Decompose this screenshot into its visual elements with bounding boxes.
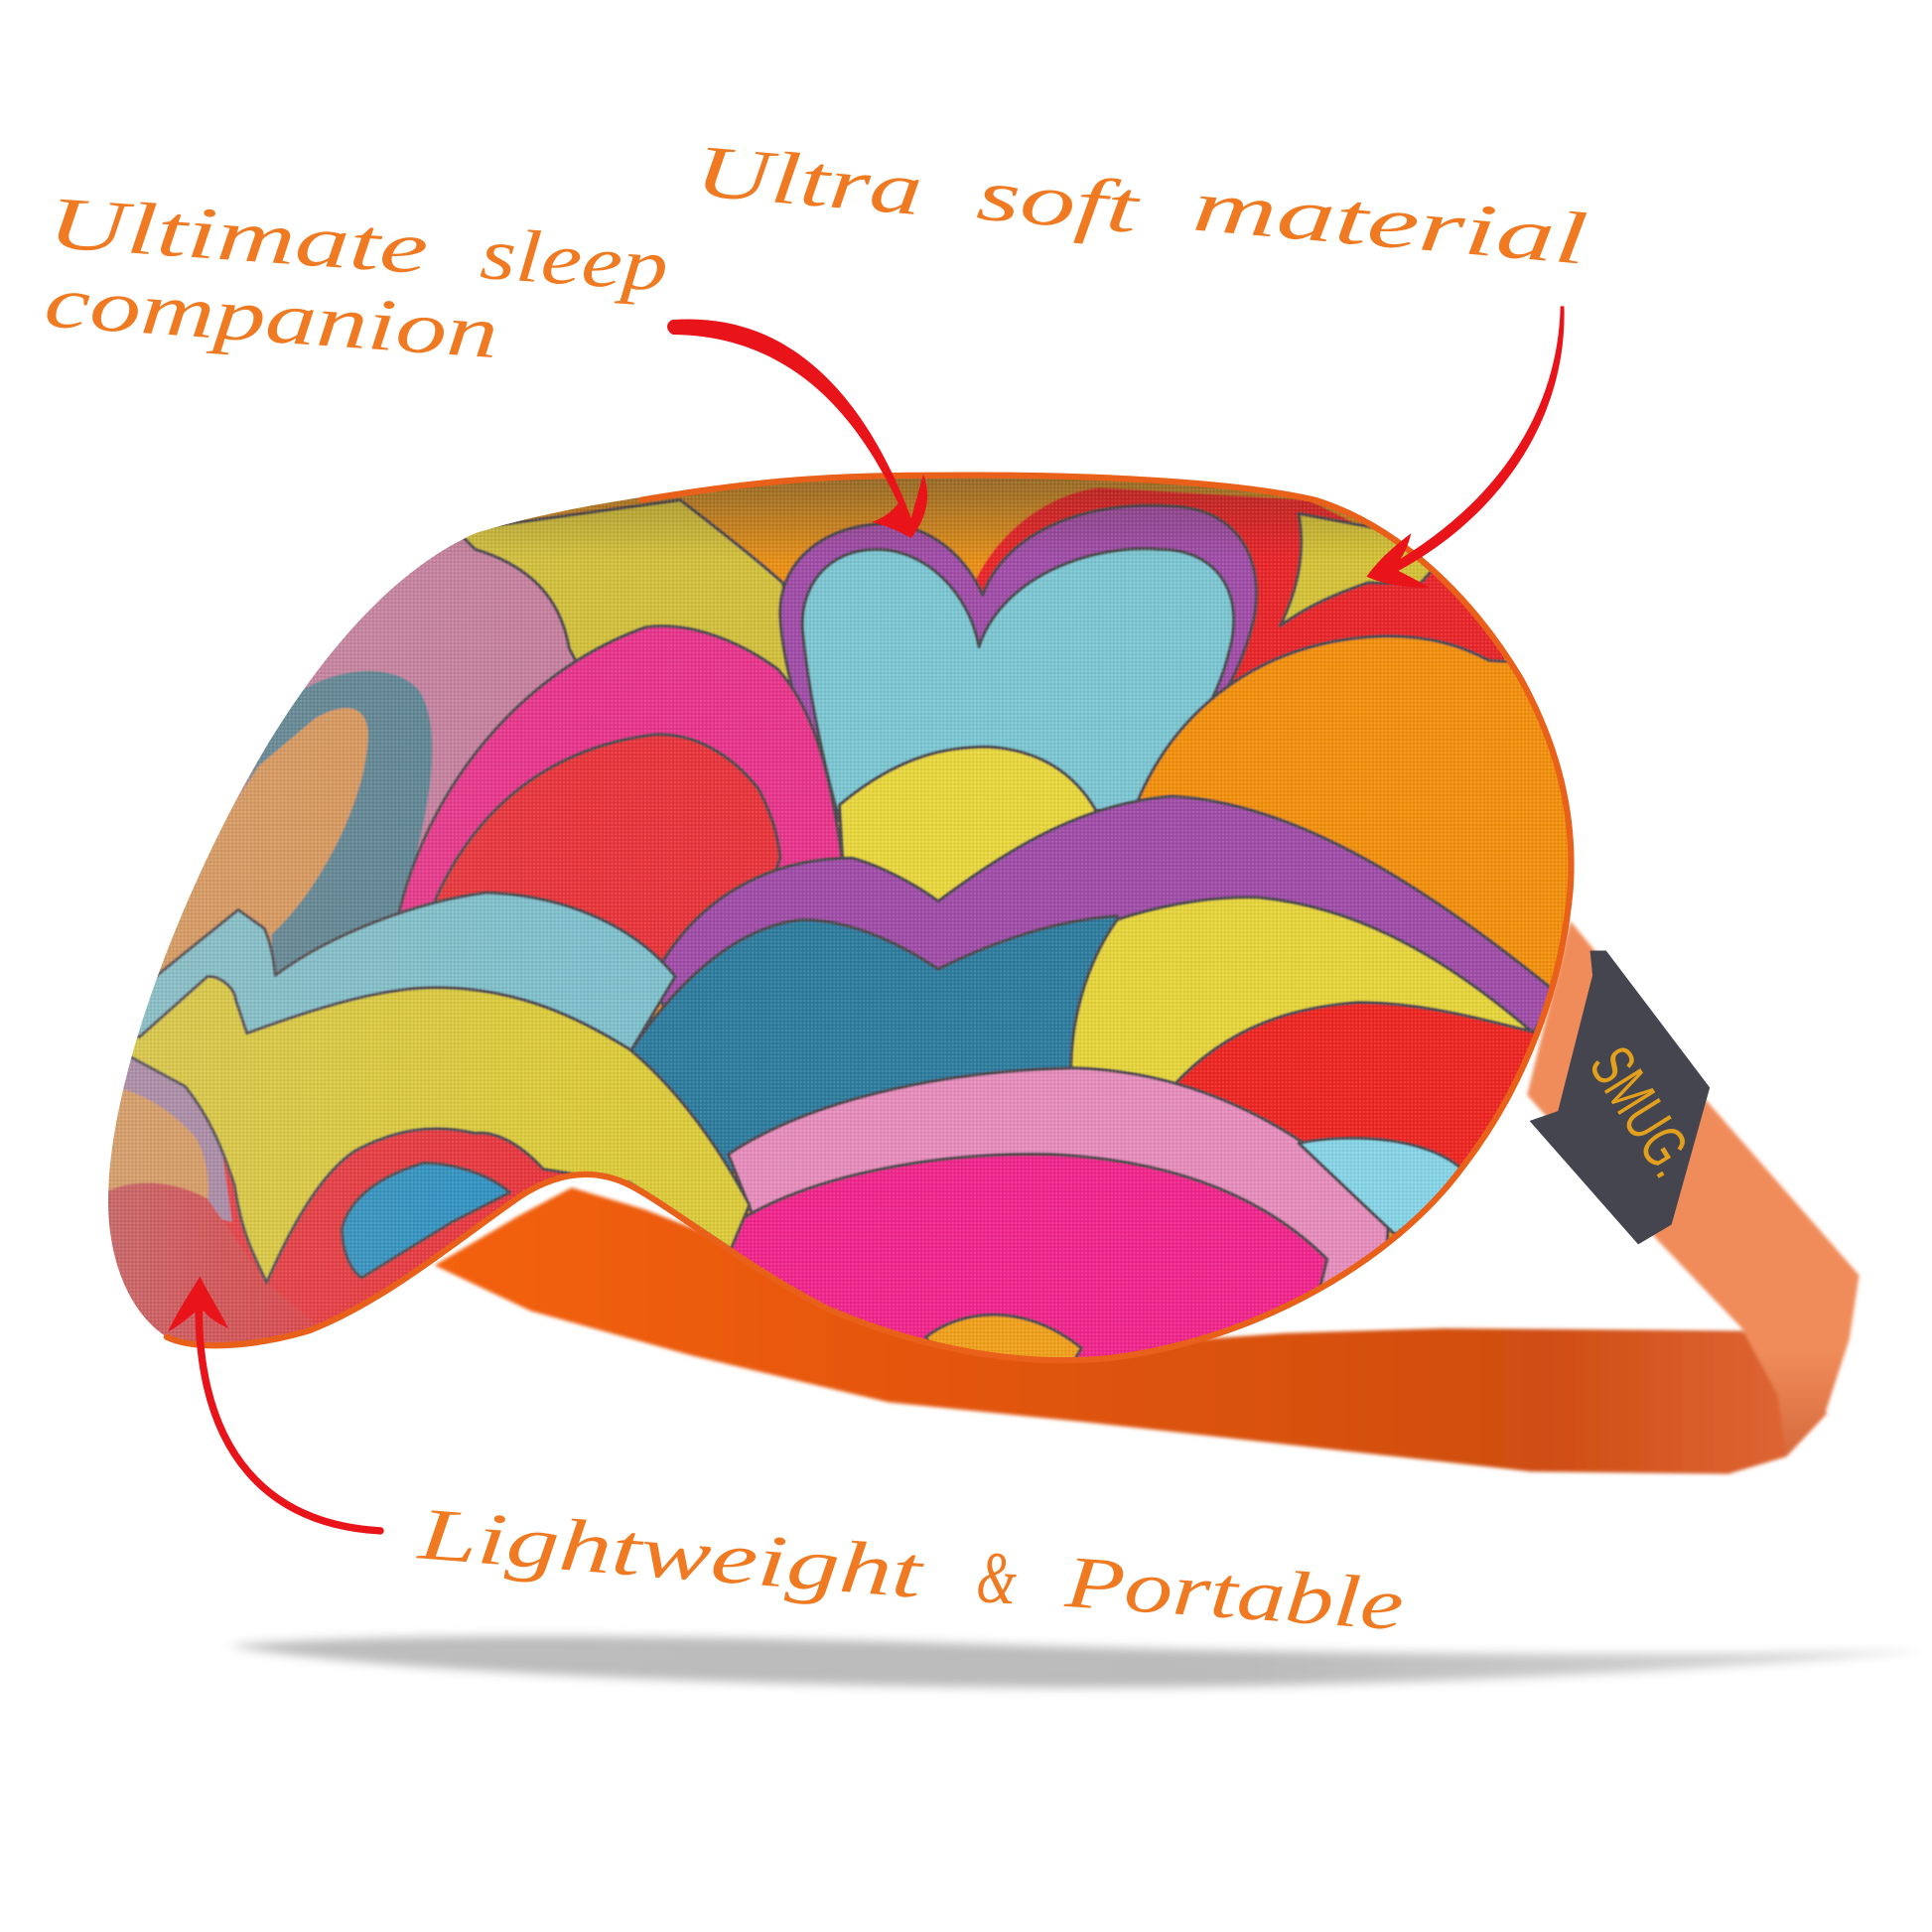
pattern base xyxy=(515,479,1505,1239)
arrow: sleep companion to mask xyxy=(667,319,927,538)
label: Ultra soft material: material xyxy=(1189,166,1590,281)
label: Lightweight & Portable: Lightweight xyxy=(415,1493,927,1614)
ground shadow xyxy=(228,1636,1926,1688)
piping rim xyxy=(167,476,1572,1360)
label: Ultra soft material xyxy=(692,131,1590,281)
label: Ultimate sleep companion: sleep xyxy=(478,213,671,308)
label: Lightweight & Portable: & xyxy=(974,1537,1020,1620)
brand name: SMUG. xyxy=(1576,1035,1708,1188)
label: Ultimate sleep companion: companion xyxy=(42,261,501,374)
label: Ultimate sleep companion: Ultimate xyxy=(46,183,431,290)
brand tag xyxy=(1530,950,1710,1244)
label: Ultra soft material: Ultra xyxy=(692,131,925,231)
strap: salmon side section xyxy=(1527,921,1860,1455)
label: Lightweight & Portable xyxy=(415,1493,1406,1646)
strap: dark rear section xyxy=(435,1187,1827,1474)
infographic canvas xyxy=(48,147,1889,1694)
fabric weave xyxy=(98,470,1581,1370)
arrow: lightweight to mask xyxy=(168,1277,380,1531)
arrow: soft material to mask xyxy=(1366,306,1565,588)
label: Ultimate sleep companion xyxy=(42,183,671,374)
elastic strap xyxy=(435,921,1860,1474)
printed pattern shapes xyxy=(98,487,1604,1383)
left-side fade xyxy=(108,672,444,1342)
top shading xyxy=(458,479,1396,546)
label: Lightweight & Portable: Portable xyxy=(1061,1542,1406,1646)
sleep mask with printed pattern xyxy=(98,470,1604,1383)
label: Ultra soft material: soft xyxy=(974,154,1144,249)
